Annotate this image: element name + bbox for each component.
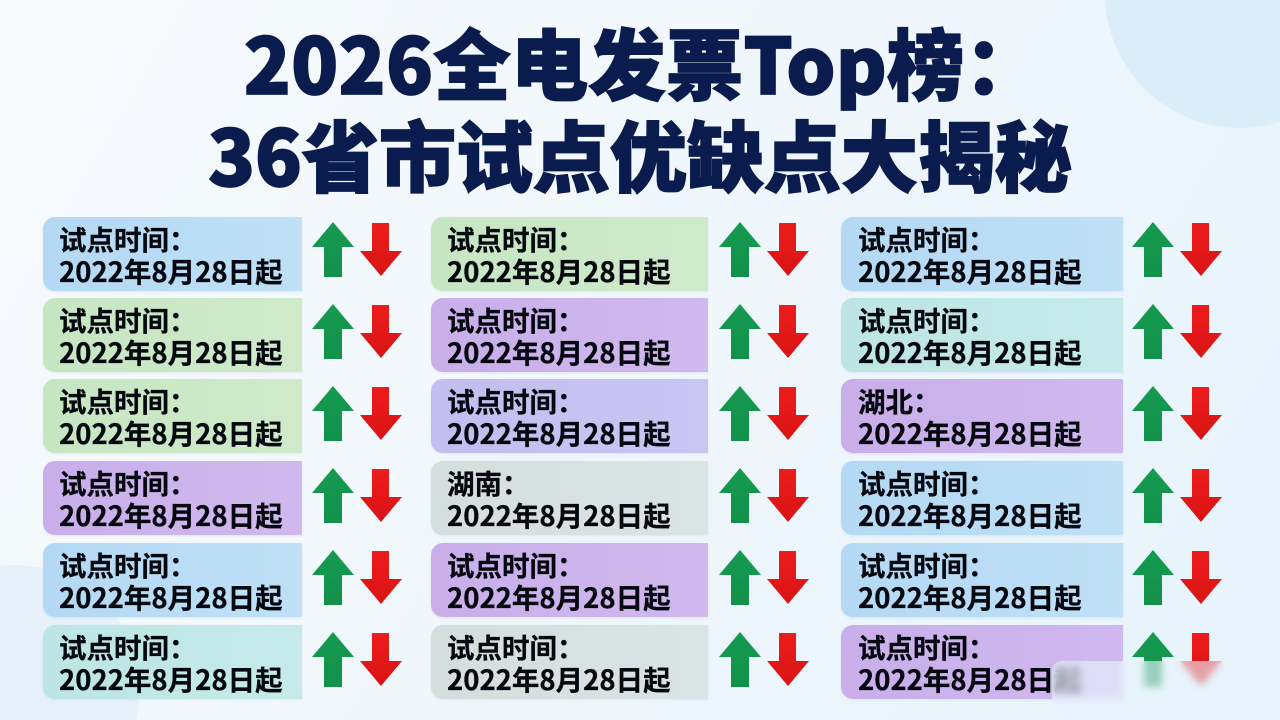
row 1 column 2 label: 试点时间：	[447, 218, 584, 258]
row 6 column 1 label	[43, 625, 302, 699]
row 5 column 2 arrows	[719, 550, 809, 605]
row 4 column 3 label: 试点时间：	[858, 462, 996, 502]
row 2 column 3 label: 2022年8月28日起	[858, 330, 1082, 370]
row 5 column 3 label: 试点时间：	[858, 544, 996, 584]
row 5 column 2 label	[431, 543, 708, 617]
row 6 column 1 arrows	[312, 632, 402, 687]
row 6 column 2 label: 试点时间：	[447, 626, 584, 666]
row 5 column 1 label	[43, 543, 302, 617]
row 6 column 3 arrows	[1132, 632, 1224, 692]
row 1 column 1 label	[43, 217, 302, 291]
row 3 column 3 label: 湖北：	[858, 380, 940, 420]
row 1 column 2 arrows	[719, 222, 809, 277]
row 1 column 1 label: 2022年8月28日起	[59, 250, 283, 290]
row 3 column 1 arrows	[312, 386, 402, 441]
row 3 column 2 label: 2022年8月28日起	[447, 412, 671, 452]
row 2 column 1 label	[43, 298, 302, 372]
row 1 column 3 label: 试点时间：	[858, 218, 996, 258]
row 2 column 3 label: 试点时间：	[858, 298, 996, 338]
row 4 column 3 label: 2022年8月28日起	[858, 494, 1082, 534]
row 2 column 3 label	[841, 298, 1123, 372]
row 5 column 1 label: 试点时间：	[59, 544, 196, 584]
row 4 column 1 label: 2022年8月28日起	[59, 494, 283, 534]
row 5 column 3 arrows	[1132, 550, 1222, 605]
row 2 column 2 arrows	[719, 304, 809, 359]
row 4 column 2 label: 湖南：	[447, 462, 530, 502]
row 3 column 3 arrows	[1132, 386, 1222, 441]
row 4 column 1 label	[43, 461, 302, 535]
row 5 column 1 label: 2022年8月28日起	[59, 576, 283, 616]
row 6 column 2 arrows	[719, 632, 809, 687]
row 3 column 1 label	[43, 379, 302, 453]
row 3 column 1 label: 2022年8月28日起	[59, 412, 283, 452]
row 6 column 3 label: 2022年8月28日起	[858, 658, 1082, 698]
row 1 column 1 label: 试点时间：	[59, 218, 196, 258]
row 4 column 2 label: 2022年8月28日起	[447, 494, 671, 534]
row 4 column 1 arrows	[312, 468, 402, 523]
row 1 column 2 label	[431, 217, 708, 291]
row 1 column 3 arrows	[1132, 222, 1222, 277]
row 6 column 3 label: 试点时间：	[858, 626, 996, 666]
row 5 column 3 label: 2022年8月28日起	[858, 576, 1082, 616]
row 5 column 1 arrows	[312, 550, 402, 605]
row 2 column 2 label: 试点时间：	[447, 298, 584, 338]
row 3 column 2 label: 试点时间：	[447, 380, 584, 420]
row 2 column 1 label: 试点时间：	[59, 298, 196, 338]
title line 2: 36省市试点优缺点大揭秘	[208, 98, 1072, 209]
row 6 column 1 label: 试点时间：	[59, 626, 196, 666]
row 3 column 3 label: 2022年8月28日起	[858, 412, 1082, 452]
title line 1: 2026全电发票Top榜：	[244, 6, 1042, 117]
row 5 column 2 label: 2022年8月28日起	[447, 576, 671, 616]
row 2 column 1 label: 2022年8月28日起	[59, 330, 283, 370]
row 1 column 2 label: 2022年8月28日起	[447, 250, 671, 290]
row 4 column 2 arrows	[719, 468, 809, 523]
row 2 column 3 arrows	[1132, 304, 1222, 359]
row 5 column 3 label	[841, 543, 1123, 617]
row 2 column 1 arrows	[312, 304, 402, 359]
row 1 column 3 label	[841, 217, 1123, 291]
row 4 column 3 label	[841, 461, 1123, 535]
row 6 column 2 label	[431, 625, 708, 699]
row 3 column 2 arrows	[719, 386, 809, 441]
row 6 column 1 label: 2022年8月28日起	[59, 658, 283, 698]
row 4 column 1 label: 试点时间：	[59, 462, 196, 502]
row 5 column 2 label: 试点时间：	[447, 544, 584, 584]
row 4 column 3 arrows	[1132, 468, 1222, 523]
row 4 column 2 label	[431, 461, 708, 535]
row 3 column 3 label	[841, 379, 1123, 453]
row 6 column 3 label	[841, 625, 1123, 699]
row 3 column 1 label: 试点时间：	[59, 380, 196, 420]
row 1 column 1 arrows	[312, 222, 402, 277]
row 1 column 3 label: 2022年8月28日起	[858, 250, 1082, 290]
row 6 column 2 label: 2022年8月28日起	[447, 658, 671, 698]
blurred watermark	[1052, 661, 1274, 709]
row 2 column 2 label	[431, 298, 708, 372]
row 2 column 2 label: 2022年8月28日起	[447, 330, 671, 370]
row 3 column 2 label	[431, 379, 708, 453]
